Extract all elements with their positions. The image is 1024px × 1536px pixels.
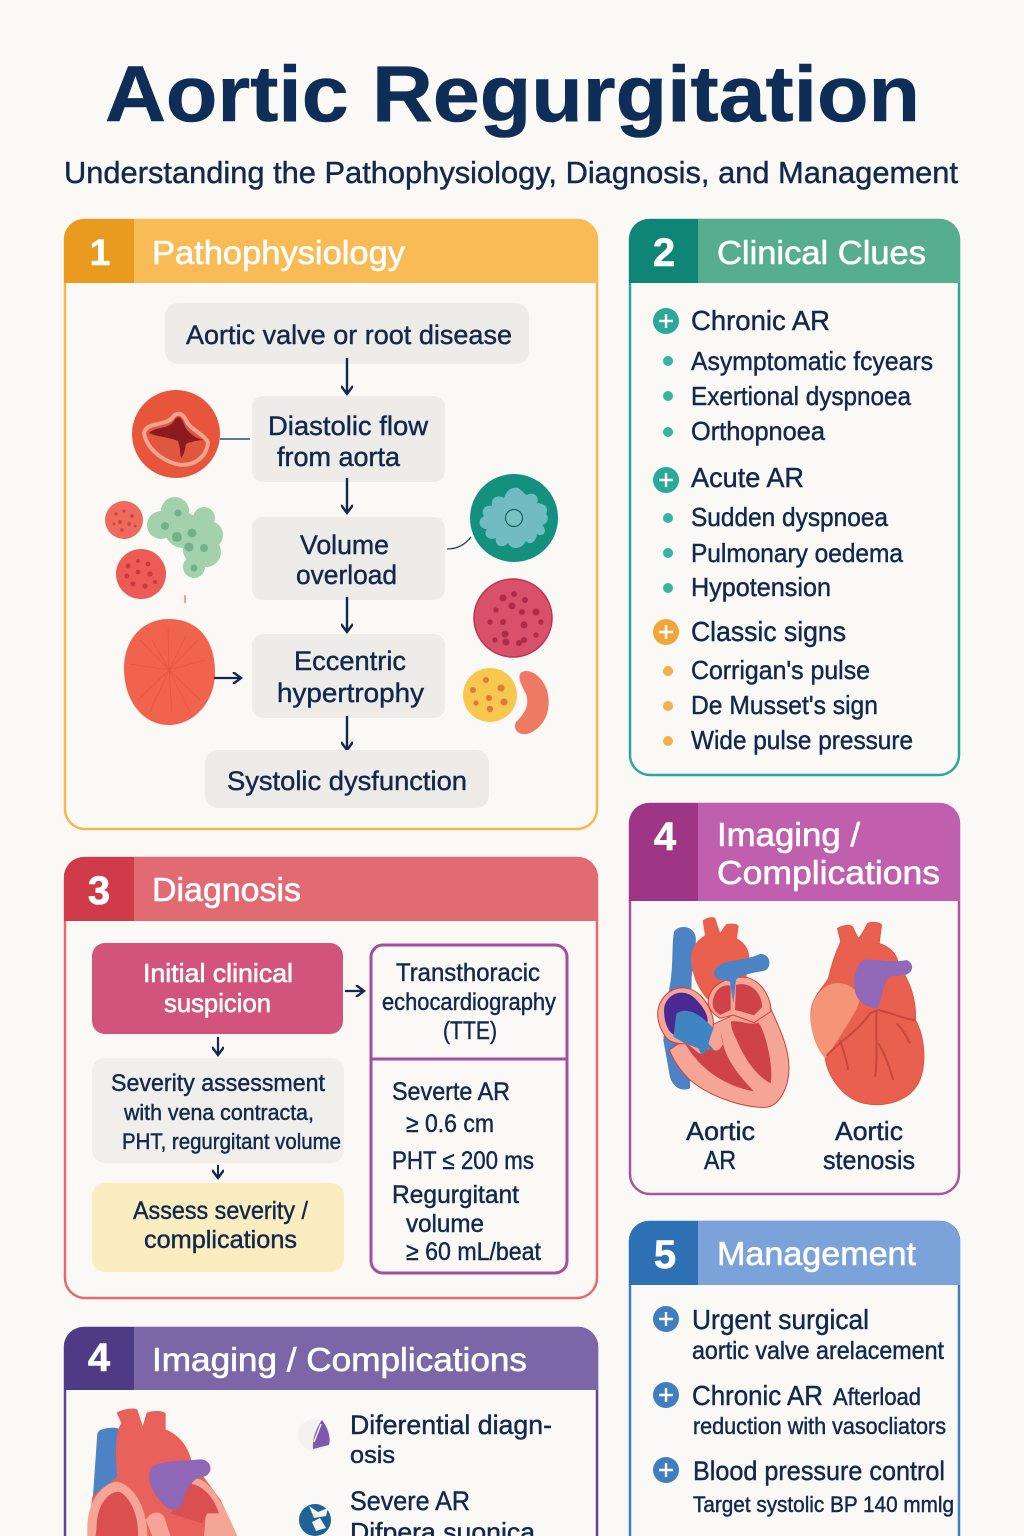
header: clinical clues: Clinical Clues	[717, 234, 926, 271]
header: management	[629, 1221, 960, 1285]
panel: diagnosis	[64, 857, 598, 1298]
arrow	[217, 1037, 219, 1055]
box: TTE criteria: PHT ≤ 200 ms	[392, 1147, 534, 1175]
box: severity assessment: Severity assessment	[111, 1070, 325, 1097]
header: pathophysiology: 1	[90, 232, 110, 273]
box: TTE criteria: Transthoracic	[396, 959, 540, 987]
list: acute AR: Sudden dyspnoea	[691, 502, 889, 532]
text: differential diagnosis: osis	[350, 1442, 395, 1469]
label: aortic AR: AR	[704, 1145, 736, 1175]
box: TTE criteria: Severte AR	[392, 1078, 510, 1106]
arrow	[345, 990, 364, 992]
text: severe AR: Severe AR	[350, 1486, 470, 1516]
arrow	[346, 358, 348, 394]
flow box: volume overload: overload	[296, 560, 397, 590]
header: imaging / complications bottom: 4	[88, 1336, 111, 1380]
item: blood pressure control: Blood pressure control	[693, 1456, 945, 1486]
panel: pathophysiology	[64, 219, 598, 829]
flow box: systolic dysfunction: Systolic dysfunction	[227, 766, 467, 796]
illustration: heart bottom	[87, 1409, 237, 1536]
icon: pink cell	[474, 579, 552, 657]
item: blood pressure control: Target systolic BP 140 mmlg	[693, 1492, 954, 1517]
box: TTE criteria: ≥ 60 mL/beat	[406, 1238, 541, 1266]
text: differential diagnosis	[350, 1410, 552, 1469]
flow box: diastolic flow: Diastolic flow	[268, 411, 429, 441]
label: aortic stenosis: Aortic	[835, 1116, 903, 1146]
box: TTE criteria: volume	[406, 1210, 484, 1238]
item: chronic AR afterload: reduction with vasocliators	[693, 1413, 946, 1439]
box: severity assessment: PHT, regurgitant volume	[122, 1129, 341, 1154]
item: chronic AR afterload: Afterload	[833, 1384, 921, 1411]
list: chronic AR: Exertional dyspnoea	[691, 381, 911, 411]
text: differential diagnosis: Diferential diagn-	[350, 1410, 552, 1440]
arrow	[346, 478, 348, 513]
title: Aortic Regurgitation	[105, 49, 920, 138]
icon: muscle tissue	[124, 619, 241, 725]
item: chronic AR afterload	[653, 1380, 946, 1439]
box: severity assessment	[92, 1058, 344, 1163]
box: TTE criteria	[371, 945, 567, 1273]
header: pathophysiology: Pathophysiology	[152, 234, 406, 271]
item: urgent surgical: aortic valve arelacement	[692, 1337, 944, 1365]
list: chronic AR: Asymptomatic fcyears	[691, 346, 933, 376]
header: imaging / complications: Complications	[717, 854, 940, 891]
flow box: eccentric hypertrophy: Eccentric	[294, 646, 406, 676]
flow box: diastolic flow: from aorta	[277, 442, 401, 472]
flow box: eccentric hypertrophy	[252, 634, 445, 718]
icon: purple marker	[298, 1419, 330, 1451]
box: initial clinical suspicion: Initial clinical	[143, 958, 293, 988]
header: diagnosis	[64, 857, 598, 921]
list: acute AR: Pulmonary oedema	[691, 538, 903, 568]
flow box: diastolic flow	[252, 396, 445, 482]
header: clinical clues	[629, 219, 960, 283]
flow box: aortic valve or root disease: Aortic valve or root disease	[186, 320, 512, 350]
flow box: volume overload: Volume	[300, 530, 389, 560]
list: chronic AR: Chronic AR	[691, 305, 830, 336]
list: chronic AR	[653, 305, 933, 446]
box: initial clinical suspicion	[92, 943, 343, 1034]
list: acute AR	[653, 462, 903, 602]
illustration: heart exterior	[811, 922, 924, 1105]
box: TTE criteria: (TTE)	[443, 1017, 497, 1045]
box: TTE criteria: Regurgitant	[392, 1181, 519, 1209]
item: blood pressure control	[653, 1456, 954, 1517]
header: imaging / complications	[629, 803, 960, 901]
list: classic signs: De Musset's sign	[691, 690, 878, 720]
box: assess severity: complications	[144, 1226, 297, 1254]
panel: imaging / complications (right)	[629, 803, 960, 1194]
icon: teal cell	[447, 474, 558, 562]
arrow	[217, 1165, 219, 1178]
arrow	[346, 716, 348, 750]
box: TTE criteria: echocardiography	[382, 989, 556, 1016]
flow box: volume overload	[252, 517, 445, 600]
icon: aortic valve cross-section	[132, 390, 250, 478]
header: management: 5	[654, 1233, 676, 1277]
icon: cells left	[105, 497, 223, 603]
label: aortic stenosis	[823, 1116, 915, 1175]
list: classic signs: Classic signs	[691, 616, 846, 647]
header: diagnosis: Diagnosis	[152, 871, 301, 908]
box: assess severity	[92, 1183, 344, 1272]
label: aortic AR: Aortic	[686, 1116, 755, 1146]
item: urgent surgical: Urgent surgical	[692, 1304, 869, 1335]
box: initial clinical suspicion: suspicion	[164, 988, 271, 1018]
panel: imaging / complications (bottom)	[64, 1327, 598, 1536]
header: pathophysiology	[64, 219, 598, 283]
header: clinical clues: 2	[653, 231, 675, 275]
list: classic signs: Wide pulse pressure	[691, 725, 913, 755]
flow box: eccentric hypertrophy: hypertrophy	[277, 678, 425, 708]
list: acute AR: Hypotension	[691, 572, 831, 602]
box: TTE criteria: ≥ 0.6 cm	[406, 1110, 494, 1138]
list: classic signs	[653, 616, 913, 755]
flow box: systolic dysfunction	[205, 750, 489, 808]
icon: blue marker	[299, 1504, 331, 1536]
header: diagnosis: 3	[88, 869, 110, 913]
item: chronic AR afterload: Chronic AR	[692, 1380, 823, 1411]
panel: clinical clues	[629, 219, 960, 775]
header: imaging / complications: 4	[654, 815, 677, 859]
list: chronic AR: Orthopnoea	[691, 416, 826, 446]
header: imaging / complications: Imaging /	[717, 816, 861, 853]
header: imaging / complications bottom: Imaging / Complications	[152, 1341, 527, 1378]
box: assess severity: Assess severity /	[133, 1197, 308, 1225]
icon: yellow cell and bean	[463, 668, 549, 734]
label: aortic stenosis: stenosis	[823, 1145, 915, 1175]
panel: management	[629, 1221, 960, 1536]
box: severity assessment: with vena contracta,	[123, 1100, 314, 1125]
header: management: Management	[717, 1235, 916, 1272]
label: aortic AR	[686, 1116, 755, 1175]
arrow	[346, 597, 348, 632]
text: severe AR	[350, 1486, 536, 1536]
list: acute AR: Acute AR	[691, 462, 804, 493]
subtitle: Understanding the Pathophysiology, Diagnosis, and Management	[64, 155, 958, 190]
list: classic signs: Corrigan's pulse	[691, 655, 870, 685]
illustration: heart cross-section	[658, 917, 789, 1107]
item: urgent surgical	[653, 1304, 944, 1365]
flow box: aortic valve or root disease	[165, 303, 529, 364]
header: imaging / complications bottom	[64, 1327, 598, 1390]
